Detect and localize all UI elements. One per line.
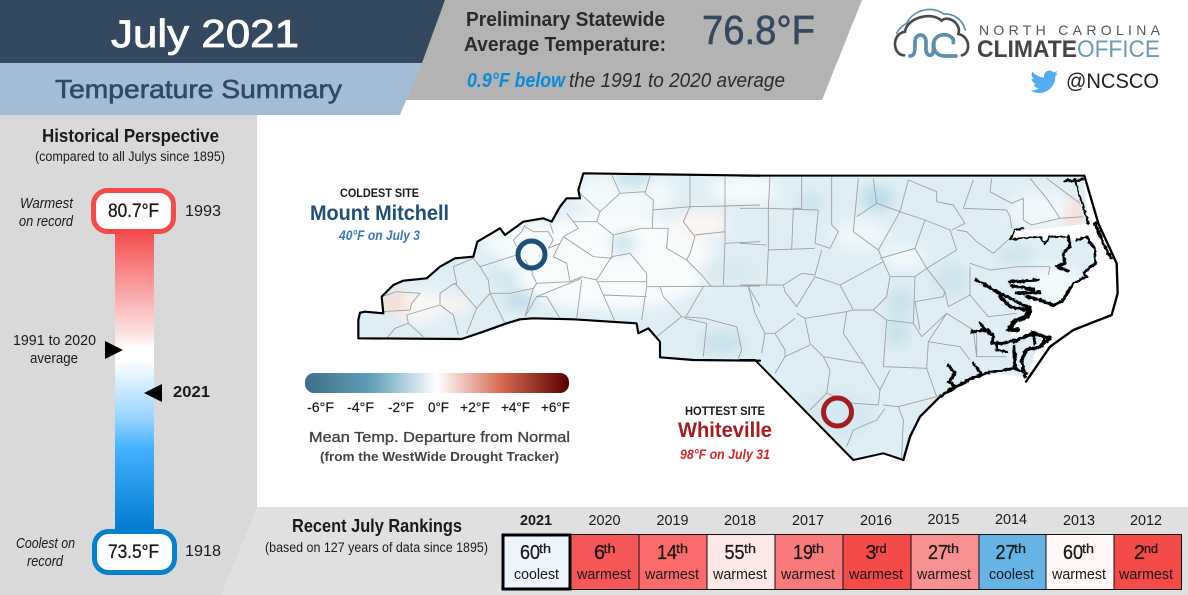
heading: historical perspective: Historical Perspective [42,126,219,146]
heading: recent july rankings: (based on 127 years of data since 1895) [265,540,488,555]
heading: recent july rankings [265,516,488,555]
statewide average text block: Preliminary Statewide [466,9,665,31]
rank cell: 2019 [639,513,707,590]
subtitle: Temperature Summary [55,74,342,104]
heading: recent july rankings: Recent July Rankings [292,516,462,536]
callout: coldest site: COLDEST SITE [340,186,419,200]
title: July 2021 [111,13,299,56]
rank cell: 2018: warmest [712,567,767,583]
rank cell: 2016: 2016 [860,513,892,529]
rank cell: 2014: coolest [989,567,1034,583]
rank cell: 2016: 3 [866,542,876,564]
logo: NC Climate Office: @NCSCO [1066,70,1159,93]
statewide average text block [464,7,815,92]
rank cell: 2014 [979,512,1046,590]
label: warmest on record: Warmest [20,196,74,212]
callout: coldest site: 40°F on July 3 [338,228,420,243]
rank cell: 2021 highlighted: th [539,541,551,556]
legend labels: -4°F [347,400,374,415]
rank cell: 2015: 27 [928,542,948,564]
callout: coldest site: Mount Mitchell [310,202,449,225]
rank cell: 2013: 2013 [1063,513,1095,529]
rank cell: 2018: th [744,541,756,556]
estuaries and sounds [940,179,1111,397]
rank cell: 2020: 2020 [588,513,620,529]
panel: subtitle band [0,63,422,115]
legend labels: +6°F [541,400,570,415]
rank cell: 2012: nd [1144,541,1158,556]
chart: thermometer scale [94,190,174,572]
legend labels: -2°F [388,400,414,415]
panel: recent rankings background [221,507,1188,595]
panel: statewide average banner [402,0,862,100]
rank cell: 2012 [1114,513,1182,590]
statewide average text block: 0.9°F below [467,70,566,92]
legend labels: +2°F [460,400,490,415]
rank cell: 2017: 2017 [792,513,824,529]
statewide average text block: Average Temperature: [464,34,666,56]
rank cell: 2017 [775,513,843,590]
map: North Carolina departure from normal [350,165,1130,465]
rank cell: 2021 highlighted: coolest [514,567,559,583]
rank cell: 2018: 55 [724,542,744,564]
rank cell: 2012: 2012 [1130,513,1162,529]
heading: historical perspective [35,126,225,164]
callout: hottest site: HOTTEST SITE [685,404,765,418]
statewide average text block: the 1991 to 2020 average [569,70,785,92]
label: warmest year: 1993 [185,203,221,220]
map shading [360,174,1094,459]
legend source: (from the WestWide Drought Tracker) [320,449,559,464]
rank cell: 2020: warmest [576,567,631,583]
logo: NC Climate Office: OFFICE [1077,36,1160,63]
label: average [13,332,96,367]
icon: cloud [895,9,968,56]
rank cell: 2015 [911,512,979,590]
rank cell: 2020: 6 [594,542,605,564]
label: average: 1991 to 2020 [13,332,96,349]
rank cell: 2017: th [812,541,824,556]
rank cell: 2016: warmest [848,567,903,583]
rank cell: 2013 [1046,513,1114,590]
rank cell: 2012: 2 [1134,542,1145,564]
rank cell: 2014: 27 [996,542,1016,564]
coolest on record box [94,532,174,572]
callout: hottest site: Whiteville [678,419,772,442]
rank cell: 2015: th [947,541,959,556]
label: coolest year: 1918 [185,543,221,560]
rank cell: 2013: 60 [1063,542,1083,564]
statewide average text block: 76.8°F [702,7,815,53]
rank cell: 2014: 2014 [995,512,1027,528]
legend labels: -6°F [307,400,334,415]
rank cell: 2016 [843,513,911,590]
state border west [358,173,760,361]
legend labels: +4°F [501,400,530,415]
callout: hottest site: 98°F on July 31 [680,447,770,462]
warmest value: 80.7°F [108,201,159,222]
rank cell: 2012: warmest [1118,567,1173,583]
label: coolest on record: Coolest on [16,536,75,552]
logo: NC Climate Office [895,9,1161,93]
marker: hottest site [824,398,852,426]
coolest value: 73.5°F [108,542,159,563]
rank cell: 2015: warmest [916,567,971,583]
rank cell: 2017: 19 [793,542,813,564]
logo: NC Climate Office: NORTH CAROLINA [979,22,1161,38]
rank cell: 2016: rd [876,541,886,556]
marker: 2021 [144,384,162,402]
panel: title band [0,0,445,63]
label: average: average [30,350,78,367]
label: 2021: 2021 [173,384,210,401]
legend bar [305,373,569,393]
logo: NC Climate Office: CLIMATE [977,36,1077,63]
marker: coldest site [518,241,545,268]
label: coolest on record [16,536,75,570]
legend labels: 0°F [428,400,449,415]
label: coolest on record: record [27,554,64,570]
rank cell: 2021 highlighted: 2021 [520,513,552,529]
legend labels [307,400,570,415]
marker: 1991 to 2020 average [105,341,123,359]
rank cell: 2018: 2018 [724,513,756,529]
panel: historical perspective background [0,115,257,595]
legend title: Mean Temp. Departure from Normal [309,429,570,446]
rank cell: 2015: 2015 [928,512,960,528]
rank cell: 2019: 2019 [656,513,688,529]
thermometer bar [115,230,154,532]
label: warmest on record [19,196,74,230]
rank cell: 2014: th [1014,541,1026,556]
heading: historical perspective: (compared to all Julys since 1895) [35,149,225,164]
rank cell: 2020: th [604,541,616,556]
county lines west [382,175,760,358]
warmest on record box [94,190,174,232]
county lines east [740,177,1083,458]
rank cell: 2013: th [1082,541,1094,556]
legend: temperature departure [305,373,570,464]
callout: coldest site [310,186,449,243]
table: recent july rankings [503,512,1182,590]
rank cell: 2019: 14 [657,542,677,564]
rank cell: 2019: warmest [644,567,699,583]
rank cell: 2018 [707,513,775,590]
rank cell: 2019: th [676,541,688,556]
state border and outer coast east [740,176,1118,460]
rank cell: 2020 [571,513,639,590]
label: warmest on record: on record [19,214,74,230]
icon: twitter bird [1030,71,1058,93]
rank cell: 2021 highlighted: 60 [520,542,540,564]
rank cell: 2021 highlighted [503,513,570,589]
rank cell: 2017: warmest [780,567,835,583]
callout: hottest site [678,404,772,462]
rank cell: 2013: warmest [1051,567,1106,583]
